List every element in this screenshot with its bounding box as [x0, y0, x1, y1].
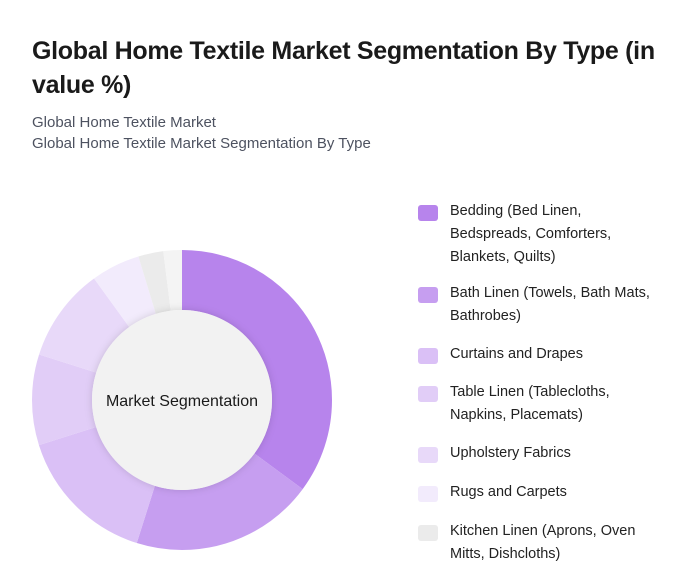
subtitle: Global Home Textile Market [32, 114, 216, 131]
legend: Bedding (Bed Linen, [450, 203, 581, 219]
legend item: rugs [418, 484, 567, 502]
legend: Rugs and Carpets [450, 484, 567, 500]
legend item: kitchen linen [418, 523, 635, 562]
legend: Upholstery Fabrics [450, 445, 571, 461]
legend item: table linen [418, 384, 610, 423]
subtitle: Global Home Textile Market Segmentation By Type [32, 135, 371, 152]
legend: Napkins, Placemats) [450, 407, 583, 423]
subtitle [32, 114, 371, 152]
legend: Bathrobes) [450, 308, 521, 324]
legend item: bath linen [418, 285, 650, 324]
legend: Mitts, Dishcloths) [450, 546, 560, 562]
legend item: bedding [418, 203, 611, 265]
legend [418, 203, 650, 562]
legend item: curtains [418, 346, 583, 364]
legend: Bath Linen (Towels, Bath Mats, [450, 285, 650, 301]
legend: Kitchen Linen (Aprons, Oven [450, 523, 635, 539]
legend: Curtains and Drapes [450, 346, 583, 362]
title: Global Home Textile Market Segmentation By Type (in value %) [32, 37, 655, 99]
legend item: upholstery [418, 445, 571, 463]
legend: Table Linen (Tablecloths, [450, 384, 610, 400]
legend: Blankets, Quilts) [450, 249, 556, 265]
donut chart: Market Segmentation [106, 393, 258, 410]
legend: Bedspreads, Comforters, [450, 226, 611, 242]
